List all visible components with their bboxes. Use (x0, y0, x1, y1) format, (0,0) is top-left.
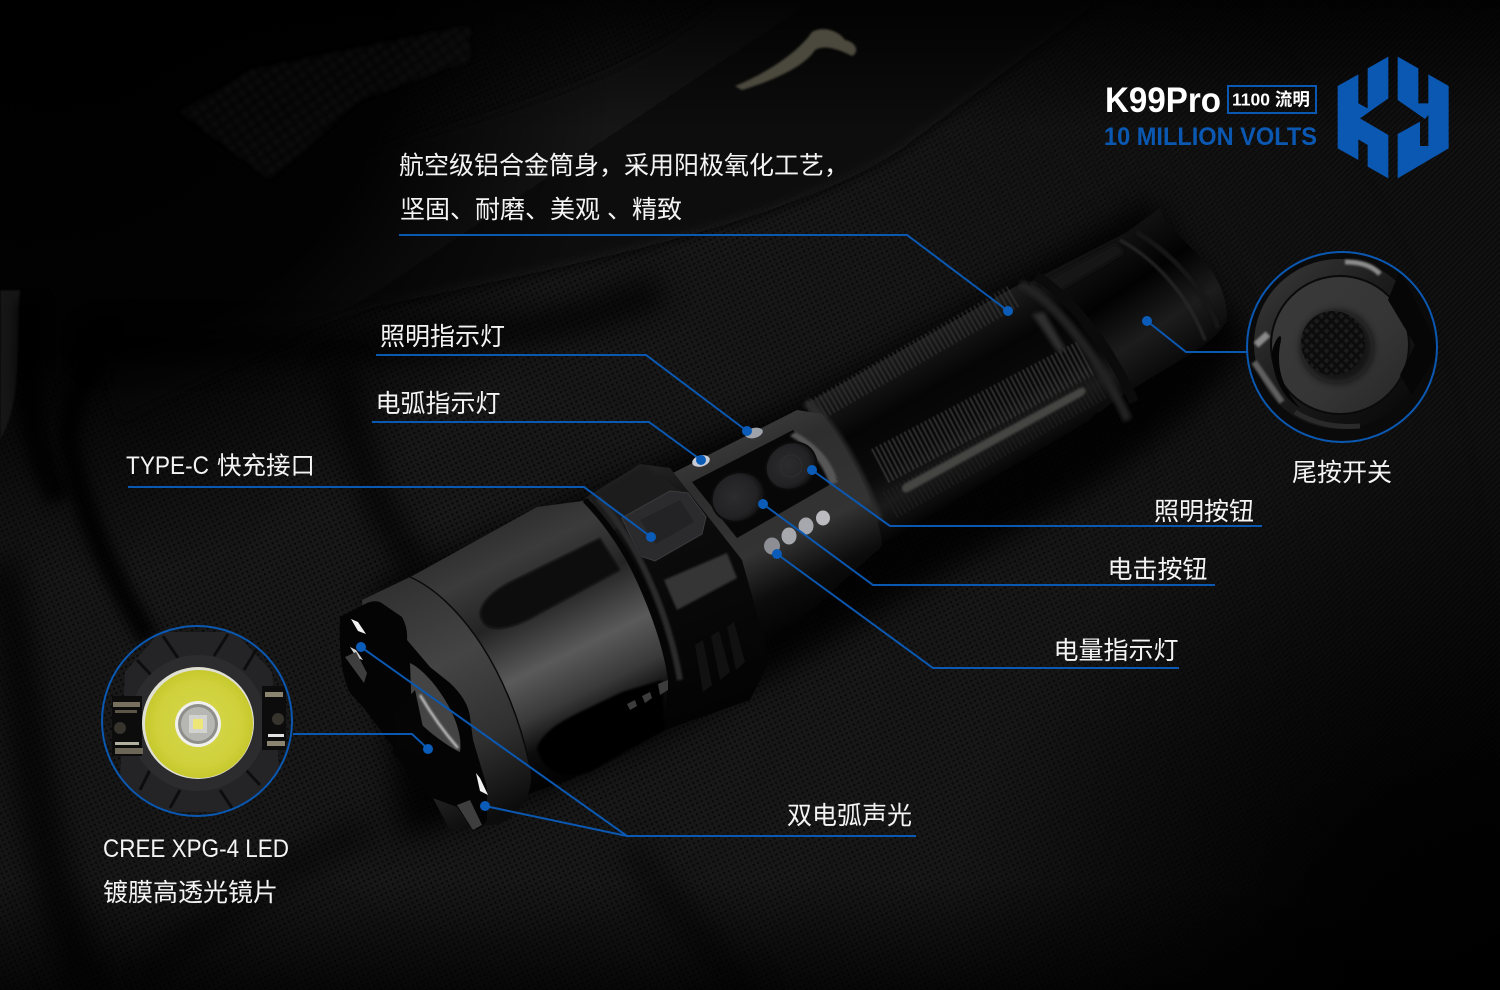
collar with charging port (585, 464, 770, 730)
upper strap area (100, 0, 1100, 420)
leader: arc indicator (372, 422, 706, 465)
USB-C rubber cover (622, 491, 706, 561)
leader: light indicator (376, 355, 752, 436)
label: stun button: 电击按钮 (1108, 556, 1208, 584)
leader: dual arc (356, 642, 916, 836)
badge: 1100 lumens (1228, 86, 1316, 113)
text: body material description: 航空级铝合金筒身，采用阳极氧化工艺， (399, 152, 849, 180)
upper scallop (480, 538, 620, 628)
label: light button: 照明按钮 (1154, 498, 1254, 526)
right screws and contacts (262, 686, 286, 750)
electrode tabs (345, 652, 367, 683)
inner collar (148, 658, 248, 772)
leader lines and dots (128, 235, 1262, 836)
vent tabs (627, 680, 668, 710)
button: stun (703, 463, 773, 531)
right notch (1388, 281, 1424, 380)
zipper pull (735, 29, 856, 90)
label: arc indicator: 电弧指示灯 (376, 390, 501, 418)
grip ring (1020, 284, 1128, 420)
inset: tail switch close-up (1247, 252, 1440, 442)
button panel (692, 430, 838, 538)
mesh patch upper left (180, 25, 470, 180)
label: light indicator: 照明指示灯 (380, 323, 505, 351)
leader: body material (399, 235, 1013, 316)
button: light (757, 433, 825, 499)
flashlight shadow (370, 200, 1250, 840)
head barrel (405, 498, 680, 800)
label: LED and lens (103, 835, 289, 907)
front scalloped face (340, 601, 488, 830)
lens (410, 663, 460, 752)
subtitle: 10 million volts: 10 MILLION VOLTS (1104, 123, 1317, 151)
tail cap section (1030, 208, 1227, 420)
leader: stun button (758, 499, 1215, 585)
left screws and contacts (112, 696, 143, 756)
label: battery indicator: 电量指示灯 (1054, 637, 1179, 665)
vent slots (695, 622, 745, 692)
text: body material description (399, 152, 849, 224)
outer ring (1254, 259, 1424, 429)
folds (0, 290, 20, 440)
label: LED and lens: 镀膜高透光镜片 (103, 879, 278, 907)
badge: 1100 lumens: 1100 流明 (1232, 90, 1310, 110)
neck with control panel (663, 410, 882, 650)
leader: type-c (128, 487, 656, 542)
electrode sparks (351, 619, 366, 634)
head bezel ring (362, 577, 531, 830)
light indicator LED (744, 426, 764, 440)
label: type-c fast charge: 快充接口 (217, 452, 315, 480)
leader: battery indicator (772, 549, 1179, 668)
flashlight (340, 200, 1250, 840)
tail plate (1271, 276, 1409, 414)
title: model name: K99Pro (1105, 81, 1221, 120)
LED emitter (175, 701, 221, 747)
inset: LED close-up (100, 625, 295, 820)
label: LED and lens: CREE XPG-4 LED (103, 835, 289, 863)
label: tail switch: 尾按开关 (1292, 459, 1392, 487)
grip slot highlight (902, 388, 1086, 492)
yellow reflector (142, 667, 254, 779)
leader: LED (293, 734, 433, 754)
shadow of button (1301, 311, 1373, 383)
leader: tail switch (1142, 316, 1247, 352)
logo: KY hexagon (1338, 57, 1449, 178)
label: type-c fast charge: TYPE-C (126, 452, 209, 480)
arc indicator LED (691, 453, 711, 469)
text: body material description: 坚固、耐磨、美观 、精致 (400, 196, 682, 224)
knurled button (1301, 311, 1365, 375)
outer scalloped ring (120, 632, 280, 812)
leader: light button (807, 465, 1262, 526)
grip body with ridges (806, 276, 1134, 545)
left shadow notch (1272, 336, 1300, 408)
battery indicator LEDs (764, 510, 830, 554)
label: dual arc sound and light: 双电弧声光 (787, 802, 912, 830)
lower scallop (537, 680, 665, 776)
